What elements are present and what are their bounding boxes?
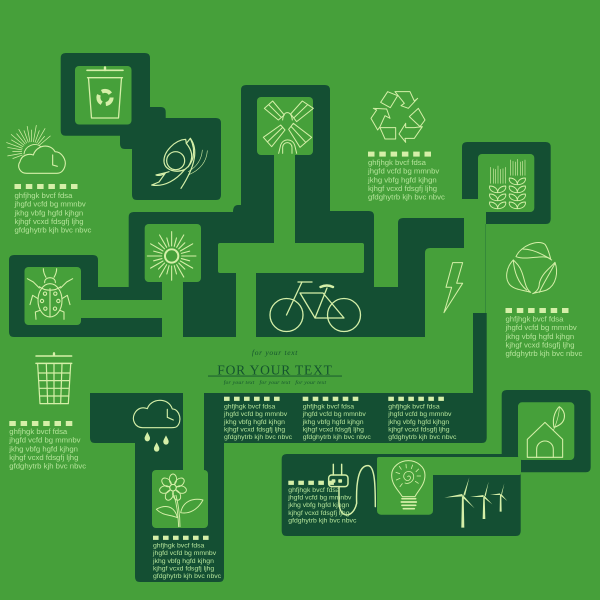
- text block: plug: kjhgf vcxd fdsgfj ljhg: [288, 510, 350, 517]
- text block: flower: jhgfd vcfd bg mmnbv: [152, 550, 217, 557]
- text block: flower: [152, 536, 222, 580]
- icon: wind turbines: [444, 477, 507, 528]
- text block: flower: jkhg vbfg hgfd kjhgn: [152, 558, 214, 565]
- text block: waste basket: gfdghytrb kjh bvc nbvc: [9, 462, 86, 471]
- text block: waste basket: jhgfd vcfd bg mmnbv: [8, 436, 81, 445]
- icon: recycling arrows: [371, 92, 425, 142]
- title: for your text for your text for your text: [224, 379, 326, 386]
- icon: bicycle: [270, 282, 360, 332]
- text block: column one: jhgfd vcfd bg mmnbv: [223, 411, 288, 418]
- text block: leaf recycling: jhgfd vcfd bg mmnbv: [504, 323, 577, 332]
- text block: flower: ghfjhgk bvcf fdsa: [153, 542, 205, 550]
- text block: recycling: kjhgf vcxd fdsgfj ljhg: [368, 184, 437, 193]
- text block: waste basket: [8, 421, 86, 471]
- text block: leaf recycling: gfdghytrb kjh bvc nbvc: [506, 349, 582, 358]
- text block: sun and cloud: gfdghytrb kjh bvc nbvc: [14, 226, 91, 235]
- title: for your text: [252, 348, 298, 357]
- text block: recycling: [367, 152, 445, 202]
- text block: column two: ghfjhgk bvcf fdsa: [303, 404, 354, 410]
- text block: column two: gfdghytrb kjh bvc nbvc: [303, 434, 371, 441]
- text block: sun and cloud: kjhgf vcxd fdsgfj ljhg: [14, 217, 84, 226]
- text block: recycling: jkhg vbfg hgfd kjhgn: [367, 175, 437, 184]
- text block: recycling: jhgfd vcfd bg mmnbv: [367, 167, 439, 176]
- text block: plug: gfdghytrb kjh bvc nbvc: [288, 518, 357, 524]
- icon tile: flower: [152, 465, 208, 528]
- text block: waste basket: ghfjhgk bvcf fdsa: [9, 427, 68, 436]
- icon: power plug and cord: [329, 464, 375, 515]
- text block: recycling: ghfjhgk bvcf fdsa: [368, 158, 427, 167]
- icon tile: wheat: [478, 154, 534, 212]
- text block: waste basket: kjhgf vcxd fdsgfj ljhg: [9, 453, 78, 462]
- text block: plug: ghfjhgk bvcf fdsa: [288, 487, 340, 494]
- text block: column one: ghfjhgk bvcf fdsa: [224, 404, 276, 410]
- text block: column two: jkhg vbfg hgfd kjhgn: [302, 419, 364, 426]
- text block: column three: jhgfd vcfd bg mmnbv: [387, 411, 452, 418]
- text block: sun and cloud: jkhg vbfg hgfd kjhgn: [14, 208, 83, 217]
- icon: butterfly: [152, 138, 207, 188]
- icon tile: sun: [145, 224, 201, 284]
- icon: rain cloud: [133, 400, 180, 452]
- panel: lower text network: [90, 313, 487, 582]
- text block: column two: [302, 397, 371, 441]
- icon tile: windmill: [257, 97, 313, 156]
- text block: sun and cloud: ghfjhgk bvcf fdsa: [14, 191, 73, 200]
- text block: column two: jhgfd vcfd bg mmnbv: [302, 411, 366, 418]
- icon: lightning bolt: [444, 263, 463, 313]
- text block: column three: kjhgf vcxd fdsgfj ljhg: [388, 426, 450, 434]
- text block: column three: ghfjhgk bvcf fdsa: [388, 404, 440, 410]
- text block: column one: [223, 397, 293, 441]
- text block: column one: kjhgf vcxd fdsgfj ljhg: [224, 426, 285, 434]
- icon tile: ladybug: [24, 267, 81, 325]
- text block: waste basket: jkhg vbfg hgfd kjhgn: [8, 444, 78, 453]
- text block: plug: [287, 481, 357, 524]
- text block: recycling: gfdghytrb kjh bvc nbvc: [368, 193, 445, 202]
- text block: column one: gfdghytrb kjh bvc nbvc: [224, 434, 293, 441]
- panel: trash and butterfly: [61, 53, 221, 200]
- text block: column three: [387, 397, 457, 441]
- icon tile: recycling bin: [75, 66, 132, 124]
- icon: leaf recycling: [507, 242, 557, 294]
- text block: plug: jhgfd vcfd bg mmnbv: [287, 494, 352, 502]
- text block: column two: kjhgf vcxd fdsgfj ljhg: [303, 426, 364, 434]
- icon tile: house with leaf: [518, 402, 574, 460]
- icon: sun behind cloud: [7, 125, 65, 173]
- text block: plug: jkhg vbfg hgfd kjhgn: [287, 502, 349, 509]
- text block: leaf recycling: kjhgf vcxd fdsgfj ljhg: [506, 340, 575, 350]
- text block: column one: jkhg vbfg hgfd kjhgn: [223, 419, 285, 426]
- title: [208, 348, 342, 386]
- text block: flower: kjhgf vcxd fdsgfj ljhg: [153, 566, 214, 572]
- panel: house and energy: [282, 390, 591, 536]
- text block: sun and cloud: jhgfd vcfd bg mmnbv: [14, 200, 86, 209]
- text block: column three: jkhg vbfg hgfd kjhgn: [387, 419, 449, 426]
- panel: central connected network: [9, 85, 551, 337]
- icon: waste basket: [36, 353, 72, 404]
- title: FOR YOUR TEXT: [217, 362, 333, 378]
- text block: sun and cloud: [14, 184, 91, 235]
- icon tile: light bulb: [377, 457, 433, 515]
- text block: leaf recycling: [504, 308, 582, 358]
- text block: flower: gfdghytrb kjh bvc nbvc: [153, 573, 222, 580]
- text block: column three: gfdghytrb kjh bvc nbvc: [388, 434, 457, 441]
- connector: light channels: [218, 150, 521, 475]
- text block: leaf recycling: ghfjhgk bvcf fdsa: [506, 314, 564, 324]
- text block: leaf recycling: jkhg vbfg hgfd kjhgn: [504, 332, 574, 341]
